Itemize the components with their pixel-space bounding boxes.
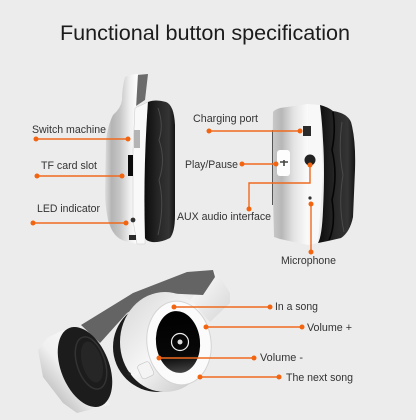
play/pause button (277, 150, 290, 176)
callout: AUX audio interface: AUX audio interface (177, 211, 271, 223)
headphone side view: left (105, 74, 175, 244)
switch slider (134, 130, 140, 148)
callout: volume plus (204, 322, 352, 334)
headband inner (81, 270, 215, 343)
callout: microphone (281, 202, 336, 267)
callout: microphone: Microphone (281, 255, 336, 267)
left pad hole (77, 339, 107, 385)
left ear cup shell (38, 330, 110, 413)
headphone front view: bottom (38, 270, 230, 415)
control disc (153, 309, 203, 375)
right cup housing (120, 292, 210, 392)
control ring (141, 297, 217, 389)
callout: switch machine (32, 124, 130, 142)
callout: play/pause: Play/Pause (185, 159, 238, 171)
shell dark edge (272, 130, 274, 205)
callout: charging port (193, 113, 302, 134)
left ear pad (47, 319, 123, 415)
callout: LED indicator (30, 203, 128, 226)
LED hole (131, 218, 135, 222)
ear pad (318, 105, 355, 243)
side jack (127, 372, 131, 376)
callout: volume minus: Volume - (260, 352, 303, 364)
AUX jack (304, 154, 316, 166)
outer shell (273, 104, 308, 245)
outer shell (105, 74, 138, 244)
side plate (133, 102, 148, 244)
callout: the next song (198, 372, 353, 384)
callout: the next song: The next song (286, 372, 353, 384)
side plate (308, 104, 323, 245)
callout: play/pause (185, 159, 278, 171)
callout: AUX audio interface (177, 162, 312, 223)
callout: in a song: In a song (275, 301, 318, 313)
ear pad (144, 100, 175, 242)
callout: charging port: Charging port (193, 113, 258, 125)
title: Functional button specification (60, 20, 350, 45)
callout: volume minus (156, 352, 303, 364)
callout: TF card slot: TF card slot (41, 160, 97, 172)
headband outer (190, 270, 230, 322)
headphone side view: right (272, 104, 355, 245)
headband strip (136, 74, 148, 106)
right ear pad (113, 302, 203, 392)
callout: switch machine: Switch machine (32, 124, 106, 136)
callout: in a song (172, 301, 318, 313)
centre ring icon (172, 334, 188, 350)
callout: volume plus: Volume + (307, 322, 352, 334)
side button (137, 361, 155, 380)
bottom port (129, 235, 136, 240)
microphone hole (308, 196, 312, 200)
charging port (303, 126, 311, 136)
TF card slot (128, 155, 133, 176)
callout: TF card slot (34, 160, 124, 178)
callout: LED indicator: LED indicator (37, 203, 100, 215)
